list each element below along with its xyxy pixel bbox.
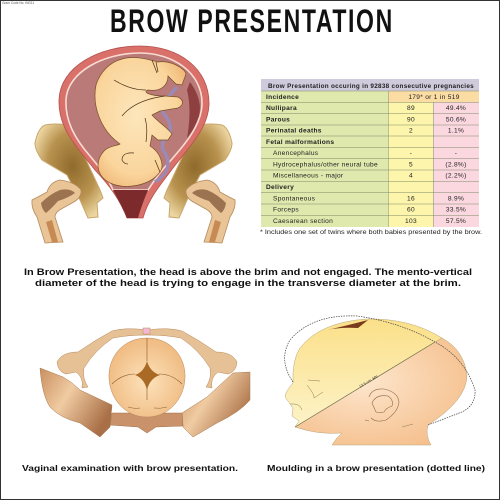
right ilium wing [182,372,250,437]
table: brow presentation statistics: (2.2%) [445,172,467,180]
description text: diameter of the head is trying to engage in the transverse diameter at the brim. [35,278,461,289]
table: brow presentation statistics: Incidence [266,94,299,101]
fetus body [95,57,186,186]
table: brow presentation statistics: 2 [409,128,413,134]
table: brow presentation statistics: 4 [409,172,413,180]
table: brow presentation statistics: 16 [407,196,415,202]
table: brow presentation statistics: 103 [405,218,417,225]
uterus wall [59,46,209,218]
table: brow presentation statistics: Fetal malformations [266,139,334,146]
table: brow presentation statistics: - [410,150,412,157]
right pubic ramus [147,329,237,388]
cervix [113,190,148,218]
title: BROW PRESENTATION [110,3,392,39]
illustration: vaginal examination, pelvis from below [40,328,250,437]
left ilium wing [40,368,112,437]
table: brow presentation statistics: 50.6% [446,116,466,124]
table: brow presentation statistics: Caesarean section [273,218,333,225]
head peach lower half [295,338,467,445]
moulding dotted line [285,316,475,425]
fontanelle [327,320,368,330]
diameter line and label [295,342,435,427]
table: brow presentation statistics: 90 [407,116,415,124]
ear [365,389,399,421]
illustration: moulding in brow presentation [285,316,475,445]
caption: vaginal examination: Vaginal examination with brow presentation. [22,464,238,473]
table: brow presentation statistics: 8.9% [448,196,464,202]
table: brow presentation statistics [261,79,479,227]
table: brow presentation statistics: 89 [407,105,415,112]
table: brow presentation statistics: Miscellaneous - major [273,172,344,180]
chart code: Gram Code No. ING11 [2,1,34,5]
diameter line and label: 13.5 cm. MV [358,374,379,389]
uterus cavity [66,53,202,190]
table: brow presentation statistics: Perinatal deaths [266,128,322,134]
left hip bone and femur [32,124,103,243]
fetus detail lines [114,60,165,172]
fetal head [109,338,185,417]
table: brow presentation statistics: Brow Presentation occuring in 92838 consecutive pregnancies [268,83,474,90]
caption: moulding: Moulding in a brow presentation (dotted line) [267,464,485,473]
head yellow upper half [285,319,442,427]
table: brow presentation statistics: 1.1% [448,128,464,134]
table: brow presentation statistics: 60 [407,206,415,214]
table: brow presentation statistics: (2.8%) [445,162,467,168]
table: brow presentation statistics: 33.5% [446,206,466,214]
table: brow presentation statistics: Spontaneous [273,196,316,202]
table: brow presentation statistics: 49.4% [446,105,466,112]
left pubic ramus [57,329,147,388]
table: brow presentation statistics: - [455,150,457,157]
table: brow presentation statistics: Nullipara [266,105,297,112]
description text: In Brow Presentation, the head is above the brim and not engaged. The mento-vertical [24,267,472,278]
illustration: fetus in uterus with pelvis [32,46,235,243]
table: brow presentation statistics: Parous [266,116,290,124]
table: brow presentation statistics: Hydrocephalus/other neural tube [273,162,378,168]
description text [24,267,472,289]
face lines [290,380,413,427]
umbilical cord [155,87,177,182]
table: brow presentation statistics: Anencephalus [273,150,319,157]
table: brow presentation statistics: 5 [409,162,413,168]
placenta [187,82,200,138]
sacrum [110,413,183,433]
table: brow presentation statistics: Forceps [273,206,299,214]
table: brow presentation statistics: Delivery [266,184,294,191]
table: brow presentation statistics: 179* or 1 in 519 [408,94,460,101]
right hip bone and femur [164,124,235,243]
table: brow presentation statistics: 57.5% [446,218,466,225]
table footnote: * Includes one set of twins where both babies presented by the brow. [260,230,482,236]
pubic symphysis [143,328,150,334]
